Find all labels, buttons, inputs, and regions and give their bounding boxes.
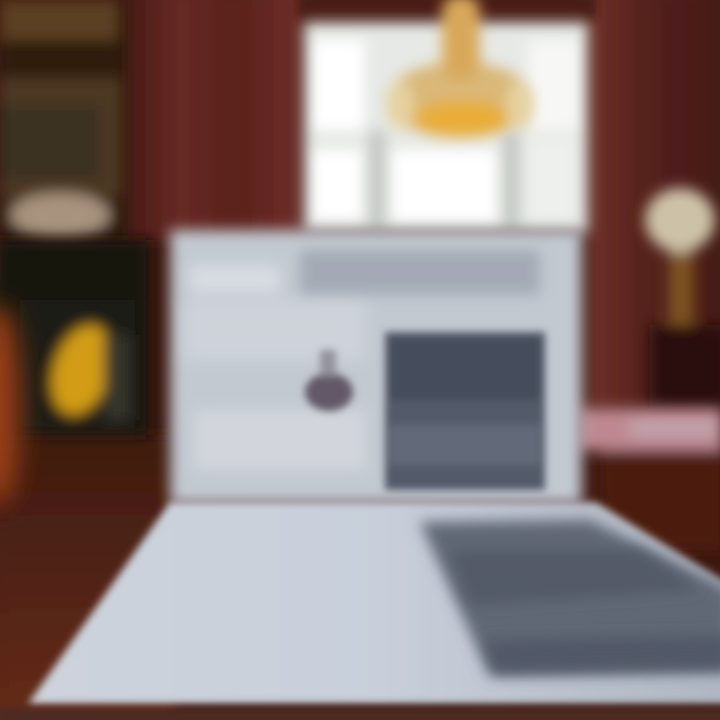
sheet surface: [28, 502, 720, 704]
panel: picture frames on left wall: [0, 0, 135, 240]
dark rows on sheet: [450, 550, 720, 672]
dark section of sheet: [420, 520, 720, 676]
orange object at left edge: [0, 305, 24, 505]
panel: foreground sheet: [28, 502, 720, 704]
dark panel on board: [385, 332, 545, 490]
table lamp: [645, 188, 720, 410]
panel: information board: [170, 230, 582, 504]
icon: dark badge: [305, 350, 353, 411]
board background: [170, 230, 582, 504]
black object with yellow accent: [0, 240, 150, 435]
left curtain: [128, 0, 303, 240]
chandelier: [386, 0, 534, 138]
right curtain: [588, 0, 720, 410]
window: [304, 22, 588, 232]
right table: [578, 408, 720, 550]
board heading band: [185, 250, 540, 470]
top wall strip: [300, 0, 595, 19]
wood floor left: [0, 435, 175, 720]
bottom edge: [0, 708, 720, 720]
